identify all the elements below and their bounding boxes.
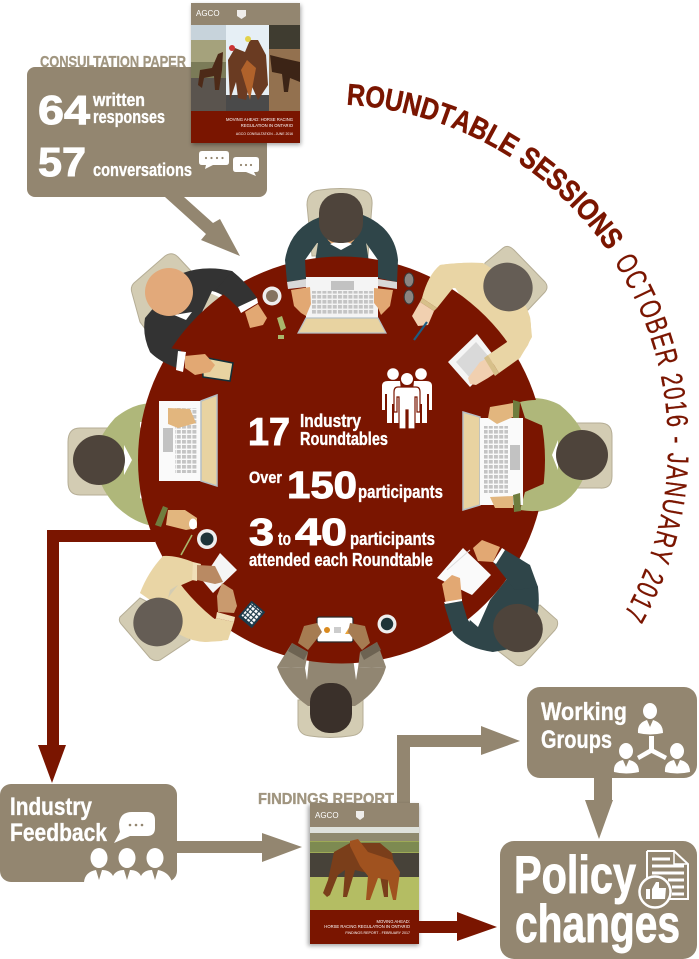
icon: speech bubbles: [199, 151, 259, 176]
arrow: roundtable to industry feedback: [38, 530, 155, 783]
table statistics: Roundtables: [300, 429, 388, 449]
person: right with laptop: [463, 400, 608, 512]
curved title: roundtable sessions dates: D: [417, 90, 444, 128]
panel: policy changes: Policy: [514, 846, 636, 905]
curved title: roundtable sessions dates: 6: [660, 414, 695, 428]
icon: group of people: [382, 368, 432, 429]
icon: three people: [84, 848, 172, 882]
consultation paper cover: MOVING AHEAD: HORSE RACING: [226, 117, 293, 122]
curved title: roundtable sessions dates: N: [582, 206, 619, 242]
person: upper left with phone: [145, 268, 267, 381]
findings report cover: AGCO: [315, 811, 339, 820]
curved title: roundtable sessions dates: 2: [654, 371, 690, 389]
curved title: roundtable sessions dates: O: [363, 79, 387, 115]
curved title: roundtable sessions dates: E: [644, 329, 681, 353]
table statistics: participants: [358, 482, 443, 502]
findings report cover: [308, 803, 419, 946]
curved title: roundtable sessions dates: O: [608, 247, 646, 280]
panel: industry feedback: Feedback: [10, 819, 107, 847]
curved title: roundtable sessions dates: O: [569, 191, 607, 228]
table statistics: 40: [295, 512, 347, 554]
consultation paper cover: [191, 3, 301, 145]
curved title: roundtable sessions dates: J: [661, 452, 696, 464]
consultation paper cover: AGCO CONSULTATION - JUNE 2016: [236, 132, 293, 136]
curved title: roundtable sessions dates: S: [552, 173, 587, 209]
person: top with laptop: [285, 193, 398, 333]
findings report cover: MOVING AHEAD:: [376, 919, 410, 924]
person: upper right with paper: [412, 253, 542, 387]
curved title: roundtable sessions dates: T: [433, 96, 459, 133]
curved title: roundtable sessions dates: 1: [624, 589, 660, 615]
panel: working groups: [527, 687, 697, 778]
chairs and torsos behind the table: [68, 188, 612, 738]
curved title: roundtable sessions dates: -: [661, 436, 696, 444]
panel: working groups: Groups: [541, 726, 612, 754]
table: [138, 256, 545, 664]
table statistics: [248, 411, 443, 570]
person: bottom with tablet: [277, 617, 386, 733]
findings report cover: HORSE RACING REGULATION IN ONTARIO: [324, 924, 411, 929]
table objects: coffee cups, glasses, calculator, pencil: [181, 273, 414, 634]
curved title: roundtable sessions dates: A: [447, 102, 477, 140]
heading: findings report: FINDINGS REPORT: [258, 791, 394, 808]
curved title: roundtable sessions dates: N: [399, 86, 425, 123]
icon: connected people: [614, 703, 690, 774]
icon: speech bubble: [114, 812, 155, 843]
findings report cover: FINDINGS REPORT - FEBRUARY 2017: [345, 931, 410, 935]
curved title: roundtable sessions dates: R: [647, 527, 684, 552]
table statistics: 17: [248, 411, 290, 454]
curved title: roundtable sessions dates: N: [658, 480, 694, 499]
curved title: roundtable sessions dates: B: [464, 109, 495, 147]
curved title: roundtable sessions dates: S: [513, 139, 546, 177]
panel: consultation paper results: 64: [38, 87, 90, 133]
consultation paper cover: AGCO: [196, 9, 220, 18]
curved title: roundtable sessions dates: E: [527, 150, 561, 187]
panel: policy changes: [500, 841, 697, 959]
person: lower right with papers: [437, 540, 551, 660]
panel: consultation paper results: 57: [38, 139, 86, 185]
panel: consultation paper results: conversations: [93, 160, 192, 180]
curved title: roundtable sessions dates: 0: [656, 385, 692, 402]
panel: consultation paper results: responses: [93, 107, 165, 127]
person: lower left with paper: [124, 553, 237, 656]
panel: consultation paper results: [27, 67, 267, 256]
arrow: working groups to policy changes: [585, 778, 613, 839]
curved title: roundtable sessions dates: A: [660, 464, 695, 482]
curved title: roundtable sessions dates: 7: [617, 601, 653, 628]
panel: industry feedback: Industry: [10, 793, 92, 821]
curved title: roundtable sessions dates: A: [651, 512, 688, 535]
heading: consultation paper: CONSULTATION PAPER: [40, 54, 186, 71]
table statistics: attended each Roundtable: [249, 550, 433, 570]
table statistics: Industry: [300, 411, 361, 431]
table statistics: to: [278, 529, 291, 549]
curved title: roundtable sessions dates: C: [617, 264, 655, 294]
curved title: roundtable sessions dates: B: [638, 313, 676, 338]
panel: consultation paper results: written: [92, 90, 145, 110]
curved title: roundtable sessions dates: T: [625, 280, 662, 307]
curved title: roundtable sessions dates: S: [540, 161, 574, 197]
curved title: roundtable sessions dates: R: [648, 345, 685, 369]
person: left with laptop: [73, 395, 217, 530]
curved title: roundtable sessions dates: R: [346, 77, 367, 112]
arrow: feedback to findings report: [177, 833, 302, 862]
consultation paper cover: REGULATION IN ONTARIO: [241, 123, 294, 128]
panel: working groups: Working: [541, 698, 627, 726]
curved title: roundtable sessions dates: L: [480, 118, 509, 155]
curved title: roundtable sessions dates: E: [493, 126, 525, 163]
table statistics: 3: [249, 512, 274, 554]
curved title: roundtable sessions dates: 2: [635, 565, 671, 589]
curved title: roundtable sessions dates: S: [593, 222, 630, 255]
table statistics: 150: [287, 465, 357, 507]
icon: document with thumbs up: [640, 851, 688, 908]
curved title: roundtable sessions dates: 1: [658, 399, 694, 415]
table statistics: participants: [350, 529, 435, 549]
curved title: roundtable sessions dates: 0: [629, 577, 666, 602]
arrow: findings report to working groups: [397, 726, 520, 805]
panel: industry feedback: [0, 784, 177, 882]
curved title: roundtable sessions dates: U: [382, 82, 406, 118]
curved title: roundtable sessions dates: U: [655, 496, 691, 517]
table statistics: Over: [249, 468, 282, 487]
curved title: roundtable sessions dates: I: [564, 185, 593, 214]
arrow: findings report to policy changes: [419, 912, 497, 941]
curved title: roundtable sessions dates: O: [631, 295, 670, 323]
curved title: roundtable sessions dates: Y: [642, 544, 679, 568]
curved title: roundtable sessions dates: [346, 77, 696, 628]
